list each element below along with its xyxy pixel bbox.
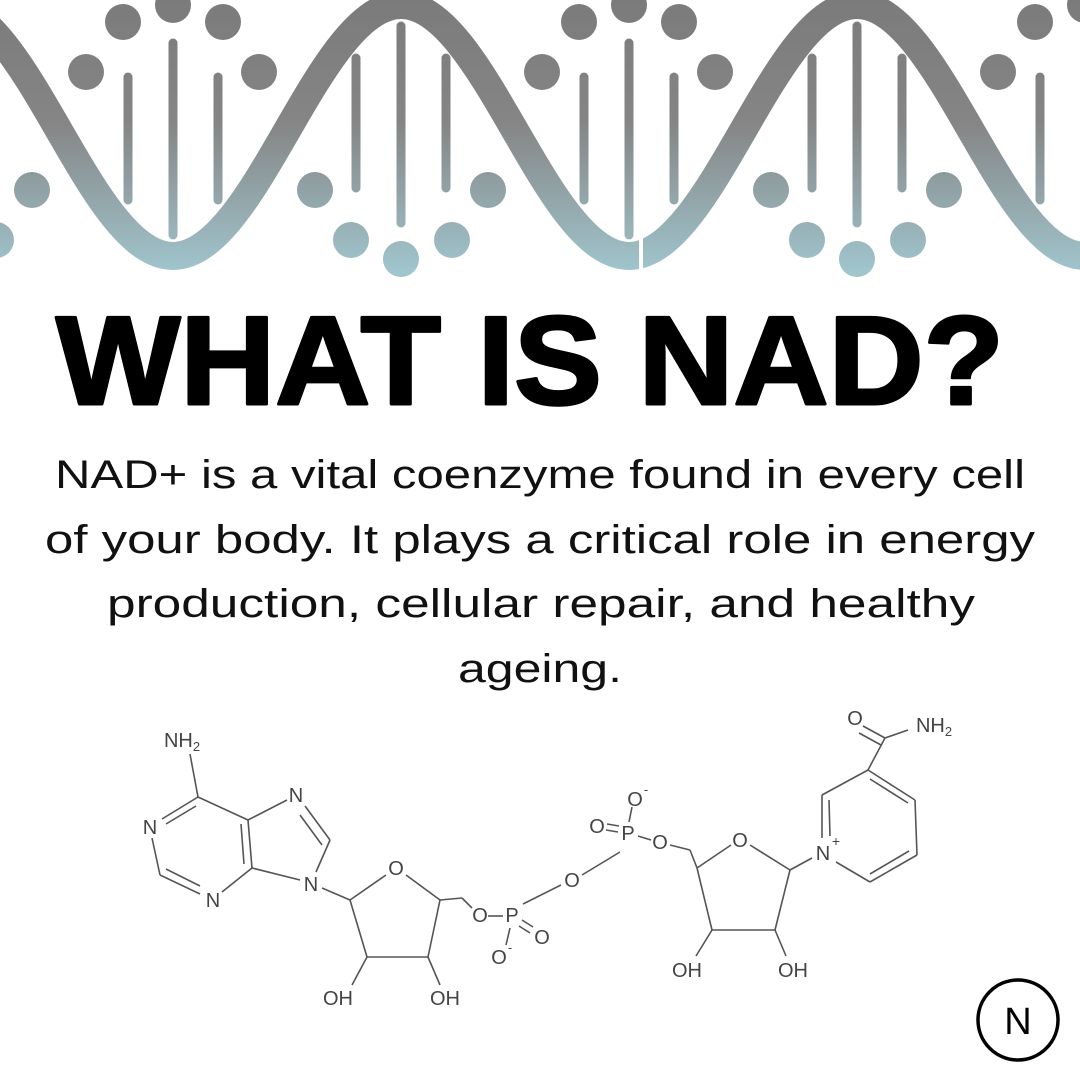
description paragraph: NAD+ is a vital coenzyme found in every cell [55, 453, 1025, 497]
molecule atom labels: 2 [945, 724, 952, 739]
description paragraph: production, cellular repair, and healthy [107, 582, 975, 626]
molecule atom labels: O [847, 708, 863, 730]
logo: N in circle [978, 980, 1058, 1060]
molecule atom labels: + [832, 833, 840, 849]
molecule atom labels: N [206, 890, 220, 912]
molecule atom labels: P [621, 823, 635, 845]
description paragraph: ageing. [458, 647, 622, 691]
molecule diagram: NAD+ structure [152, 726, 917, 985]
molecule atom labels: P [505, 905, 519, 927]
molecule atom labels: NH [164, 730, 193, 752]
molecule atom labels: O [627, 789, 643, 811]
description paragraph [45, 453, 1035, 691]
molecule atom labels: N [289, 785, 303, 807]
molecule atom labels: O [652, 832, 668, 854]
molecule atom labels [143, 708, 952, 1010]
molecule atom labels: O [472, 905, 488, 927]
dna helix banner [0, 0, 1080, 285]
molecule atom labels: O [589, 816, 605, 838]
molecule atom labels: OH [323, 988, 353, 1010]
molecule atom labels: N [816, 843, 830, 865]
ribose 2 and nicotinamide [690, 726, 917, 956]
description paragraph: of your body. It plays a critical role in energy [45, 518, 1035, 562]
adenine bonds [152, 754, 330, 894]
logo: N in circle: N [1004, 1001, 1032, 1043]
molecule atom labels: OH [778, 960, 808, 982]
molecule atom labels: O [491, 947, 507, 969]
molecule atom labels: O [388, 858, 404, 880]
molecule atom labels: 2 [193, 739, 200, 754]
molecule atom labels: NH [916, 715, 945, 737]
title: WHAT IS NAD? [56, 290, 1004, 431]
molecule atom labels: - [508, 940, 512, 955]
molecule atom labels: OH [430, 988, 460, 1010]
molecule atom labels: O [564, 870, 580, 892]
molecule atom labels: OH [672, 960, 702, 982]
molecule atom labels: - [644, 782, 648, 797]
molecule atom labels: O [732, 830, 748, 852]
molecule atom labels: O [534, 927, 550, 949]
ribose 1 and phosphates [322, 807, 690, 985]
molecule atom labels: N [143, 817, 157, 839]
molecule atom labels: N [304, 874, 318, 896]
